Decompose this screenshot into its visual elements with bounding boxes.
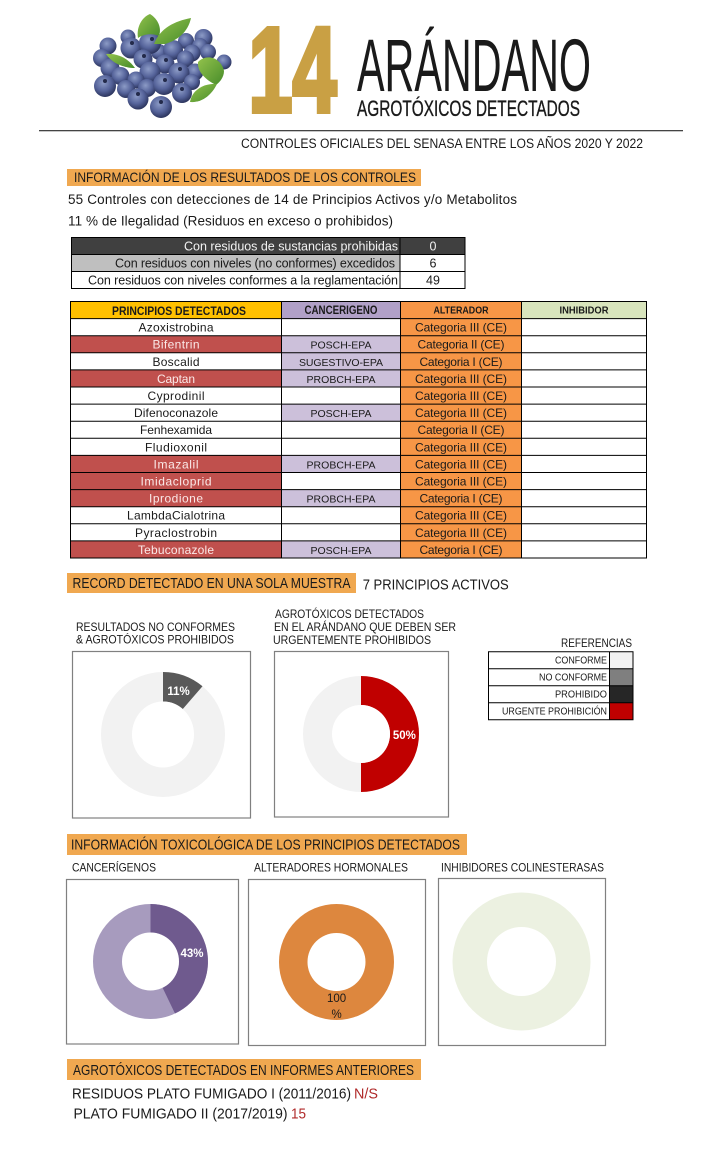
table: principios detectados: Categoria II (CE) [418,423,504,437]
chart title: urgentemente prohibidos: URGENTEMENTE PROHIBIDOS [273,633,431,647]
table: principios detectados: POSCH-EPA [310,340,372,352]
table: resumen de controles: 6 [430,256,437,270]
table: principios detectados: Bifentrin [152,338,200,352]
table: principios detectados: POSCH-EPA [310,408,372,420]
table: principios detectados: Categoria III (CE) [415,509,507,523]
icon: blueberries [93,14,232,118]
table: principios detectados: Imazalil [154,457,198,471]
table: principios detectados: ALTERADOR [434,304,489,316]
table: principios detectados: Fludioxonil [145,440,207,454]
table: principios detectados: Categoria II (CE) [418,338,504,352]
label: cancerígenos: CANCERÍGENOS [72,860,156,874]
table: principios detectados: Categoria III (CE) [415,474,507,488]
donut chart: cancerígenos 43% [66,880,238,1044]
donut chart: alteradores 100%: % [331,1009,342,1021]
chart title: resultados no conformes: & AGROTÓXICOS PROHIBIDOS [76,632,234,647]
table: principios detectados: PROBCH-EPA [306,374,376,386]
table: principios detectados: SUGESTIVO-EPA [299,357,383,369]
table: principios detectados: Fenhexamida [140,423,212,437]
legend: referencias [488,636,633,720]
heading: resultados de los controles: INFORMACIÓN DE LOS RESULTADOS DE LOS CONTROLES [74,169,416,185]
text: plato fumigado I: N/S [354,1086,378,1102]
text: ilegalidad: 11 % de Ilegalidad (Residuos en exceso o prohibidos) [68,214,393,228]
table: principios detectados: Categoria III (CE) [415,457,507,471]
table: resumen de controles: Con residuos de sustancias prohibidas [184,240,398,254]
donut chart: alteradores 100%: 100 [327,993,346,1005]
legend: referencias: NO CONFORME [539,672,607,684]
table: principios detectados: Iprodione [149,492,203,506]
text: plato fumigado II: PLATO FUMIGADO II (2017/2019) [74,1106,288,1122]
table: resumen de controles: 49 [426,274,440,288]
heading: informes anteriores: AGROTÓXICOS DETECTADOS EN INFORMES ANTERIORES [73,1062,414,1079]
text: controles con detecciones: 55 Controles con detecciones de 14 de Principios Activos y/o Metabolitos [68,192,517,207]
heading: información toxicológica: INFORMACIÓN TOXICOLÓGICA DE LOS PRINCIPIOS DETECTADOS [71,836,460,854]
text: 7 principios activos: 7 PRINCIPIOS ACTIVOS [363,578,509,594]
table: principios detectados: Imidacloprid [140,474,212,488]
legend: referencias: URGENTE PROHIBICIÓN [502,704,607,718]
label: inhibidores colinesterasas: INHIBIDORES COLINESTERASAS [441,860,604,874]
donut chart: alteradores 100% [248,880,426,1046]
donut chart: 11% no conformes: 11% [167,686,190,698]
table: principios detectados: PROBCH-EPA [306,494,376,506]
table: principios detectados: Categoria III (CE) [415,406,507,420]
heading: información toxicológica [67,834,467,855]
table: principios detectados: Cyprodinil [148,389,204,403]
table: principios detectados: Categoria III (CE) [415,389,507,403]
donut chart: cancerígenos 43%: 43% [180,948,204,960]
chart title: urgentemente prohibidos: AGROTÓXICOS DETECTADOS [275,606,424,621]
donut chart: 11% no conformes [72,652,250,818]
table: principios detectados: Categoria III (CE) [415,440,507,454]
table: resumen de controles: Con residuos con niveles conformes a la reglamentación [88,274,398,288]
table: principios detectados: CANCERIGENO [304,303,378,317]
chart title: urgentemente prohibidos [273,606,456,647]
table: principios detectados: Captan [157,372,195,386]
table: principios detectados: Categoria III (CE) [415,321,507,335]
table: principios detectados: LambdaCialotrina [127,509,225,523]
heading: record detectado: RECORD DETECTADO EN UNA SOLA MUESTRA [72,576,351,592]
heading: informes anteriores [67,1059,421,1080]
label: alteradores hormonales: ALTERADORES HORMONALES [254,860,408,874]
table: principios detectados: Tebuconazole [138,543,214,557]
table: principios detectados: Difenoconazole [134,406,218,420]
table: principios detectados: INHIBIDOR [560,304,609,316]
chart title: urgentemente prohibidos: EN EL ARÁNDANO QUE DEBEN SER [274,619,456,634]
heading: record detectado [67,573,356,593]
table: principios detectados: PROBCH-EPA [306,459,376,471]
donut chart: 50% urgente prohibición [274,652,448,817]
donut chart: inhibidores [438,878,606,1046]
table: principios detectados [70,302,646,558]
table: principios detectados: Pyraclostrobin [135,526,217,540]
legend: referencias: PROHIBIDO [555,690,607,700]
legend: referencias: REFERENCIAS [561,636,632,650]
table: principios detectados: Categoria I (CE) [420,543,502,557]
text: plato fumigado II: 15 [291,1106,306,1122]
table: principios detectados: Categoria I (CE) [420,355,502,369]
table: principios detectados: Boscalid [152,355,200,369]
table: principios detectados: Azoxistrobina [138,321,214,335]
donut chart: 50% urgente prohibición: 50% [393,730,416,742]
big number 14: 14 [248,2,336,138]
chart title: resultados no conformes: RESULTADOS NO CONFORMES [76,620,235,634]
table: principios detectados: Categoria III (CE) [415,526,507,540]
text: plato fumigado I: RESIDUOS PLATO FUMIGADO I (2011/2016) [72,1086,351,1102]
source line: CONTROLES OFICIALES DEL SENASA ENTRE LOS AÑOS 2020 Y 2022 [241,136,643,151]
legend: referencias: CONFORME [555,656,607,666]
table: resumen de controles [72,238,465,288]
table: principios detectados: POSCH-EPA [310,545,372,557]
table: principios detectados: Categoria I (CE) [420,492,502,506]
table: principios detectados: PRINCIPIOS DETECTADOS [112,304,246,318]
subtitle: agrotóxicos detectados: AGROTÓXICOS DETECTADOS [357,96,580,121]
table: principios detectados: Categoria III (CE) [415,372,507,386]
chart title: resultados no conformes [76,620,235,647]
table: resumen de controles: 0 [430,240,437,254]
table: resumen de controles: Con residuos con niveles (no conformes) excedidos [115,256,395,270]
